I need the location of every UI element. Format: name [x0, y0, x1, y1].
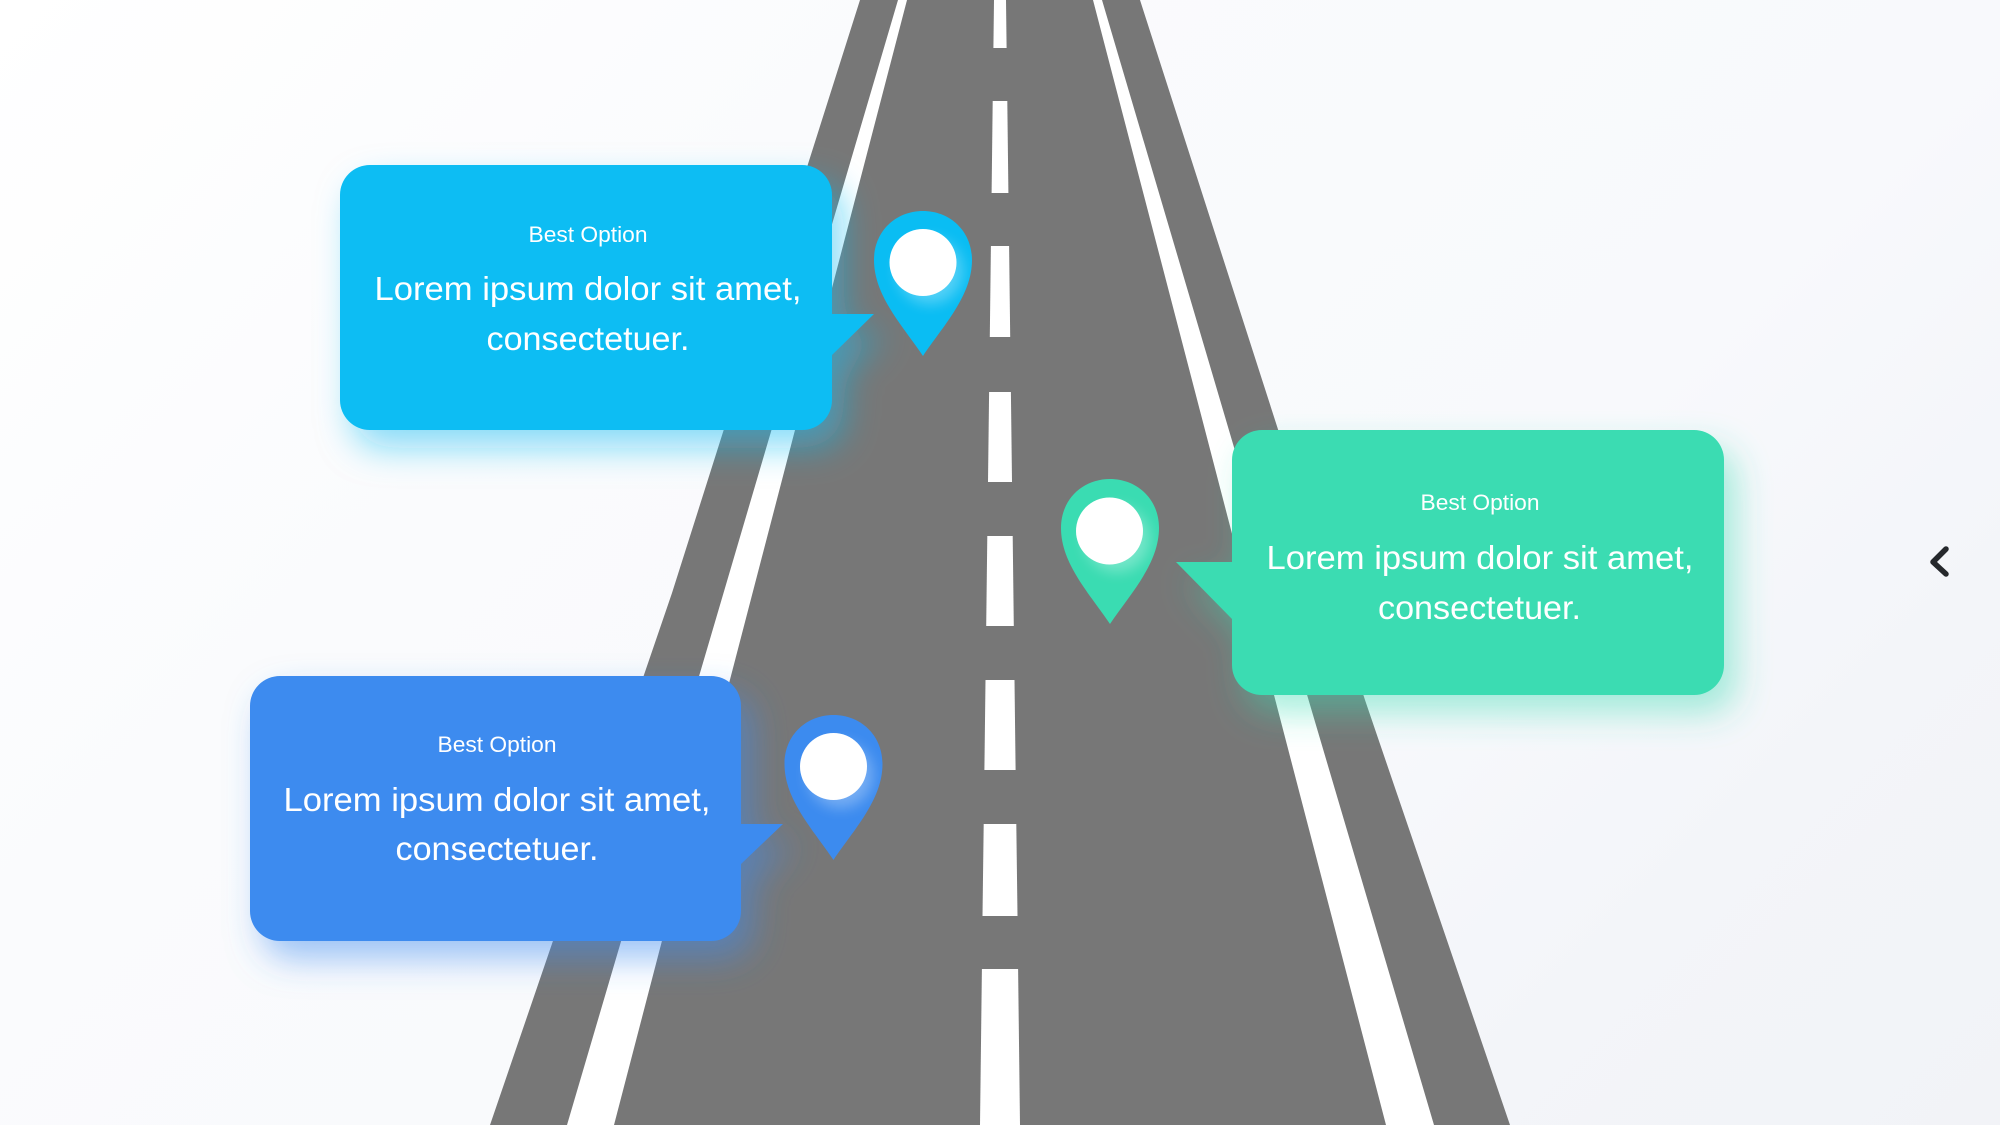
right lane line: [1093, 0, 1434, 1125]
panel: blue callout: consectetuer.: [396, 830, 598, 867]
road surface: [490, 0, 1510, 1125]
heading: Best Option: [1420, 490, 1540, 515]
panel: cyan callout: [340, 165, 874, 430]
body text: Lorem ipsum dolor sit amet,: [1266, 539, 1694, 576]
panel: cyan callout: consectetuer.: [486, 320, 690, 357]
body text: Lorem ipsum dolor sit amet,: [284, 781, 710, 818]
icon: cyan map pin: [874, 211, 972, 356]
heading: Best Option: [528, 222, 648, 247]
panel: green callout: [1176, 430, 1724, 695]
icon: back chevron: [1933, 549, 1946, 574]
panel: blue callout: [250, 676, 783, 941]
callout shape: [1176, 430, 1724, 695]
callout shape: [340, 165, 874, 430]
centre dashes: [980, 0, 1020, 1125]
body text: Lorem ipsum dolor sit amet,: [374, 270, 802, 307]
road: [490, 0, 1510, 1125]
heading: Best Option: [438, 732, 556, 757]
icon: green map pin: [1061, 479, 1159, 624]
callout shape: [250, 676, 783, 941]
left lane line: [567, 0, 907, 1125]
panel: green callout: consectetuer.: [1378, 589, 1581, 626]
icon: blue map pin: [784, 715, 882, 860]
